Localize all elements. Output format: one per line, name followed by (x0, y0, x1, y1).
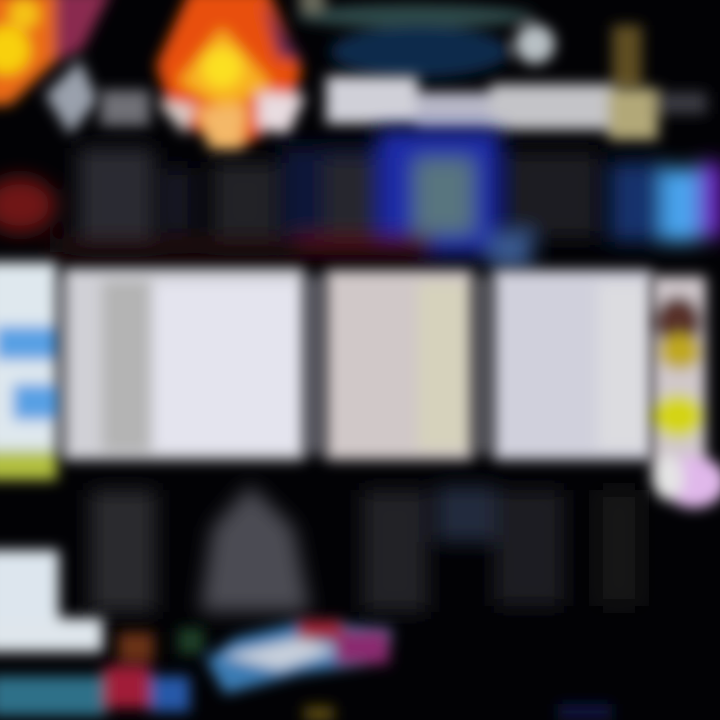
icon: centre colour burst (155, 0, 306, 152)
icon: red accent (0, 177, 56, 233)
gutters between content panels (57, 275, 495, 455)
panel: cyan highlight (610, 162, 664, 242)
panel: right accents (652, 276, 720, 508)
icon: teal arc and moon (295, 0, 642, 90)
footer colour bands (0, 620, 612, 720)
header illustrations (0, 0, 642, 152)
row of dark figures (0, 130, 720, 268)
panel: lower left white card (0, 550, 103, 652)
panel: pink card (326, 270, 472, 460)
lower row of dark figures (90, 485, 642, 612)
panel: lavender card (494, 270, 652, 460)
content panels (0, 262, 720, 508)
icon: left colour burst (0, 0, 112, 135)
panel: grey card (64, 268, 304, 460)
panel: blue highlight (378, 130, 500, 254)
panel: left blue list (0, 262, 59, 480)
title band (100, 76, 707, 140)
